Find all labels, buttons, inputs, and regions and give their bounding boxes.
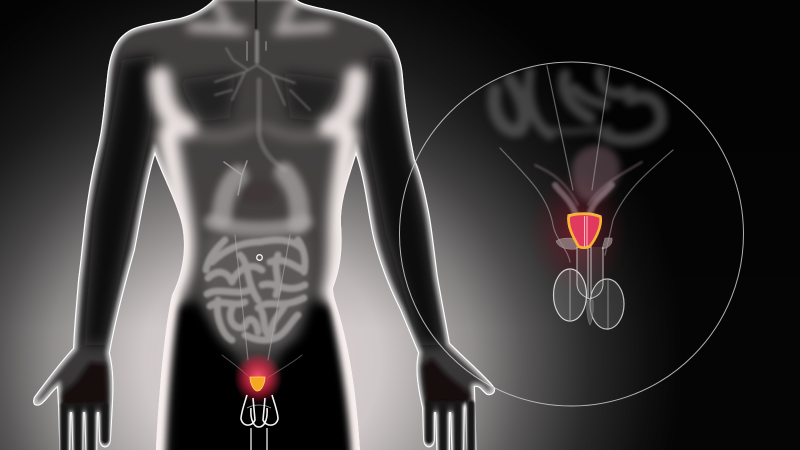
chest and torso highlights (160, 0, 356, 292)
inset circle (494, 66, 673, 330)
large prostate (568, 213, 601, 248)
human body (33, 0, 495, 450)
thigh glow (157, 298, 360, 450)
small intestine mass (203, 235, 310, 349)
right hand fingers (429, 404, 471, 450)
dark legs (168, 300, 355, 450)
stomach and liver (212, 172, 305, 230)
glans (587, 300, 593, 325)
small prostate (250, 377, 265, 391)
penile shaft (577, 247, 603, 299)
digestive organs (203, 161, 310, 378)
inset red glow (538, 181, 620, 282)
urethra (588, 240, 591, 299)
ureters and vas deferens (500, 66, 673, 262)
rim light (33, 0, 495, 450)
seminal vesicles (535, 162, 642, 212)
left hand palm (62, 362, 108, 406)
right hand palm (422, 358, 470, 404)
bladder (572, 145, 620, 202)
left testis (554, 269, 586, 321)
left hand fingers (64, 406, 105, 450)
trachea and bronchi (215, 0, 310, 170)
pelvic wings (556, 238, 612, 249)
small prostate glow (234, 352, 282, 404)
navel ring (257, 255, 262, 260)
inset ring (400, 62, 744, 406)
right testis (590, 279, 624, 330)
inset bowel (494, 72, 661, 140)
small intestine loops (206, 240, 305, 340)
ureters (235, 235, 290, 360)
arm and pectoral shading (84, 55, 444, 345)
small genital outline (241, 395, 278, 450)
